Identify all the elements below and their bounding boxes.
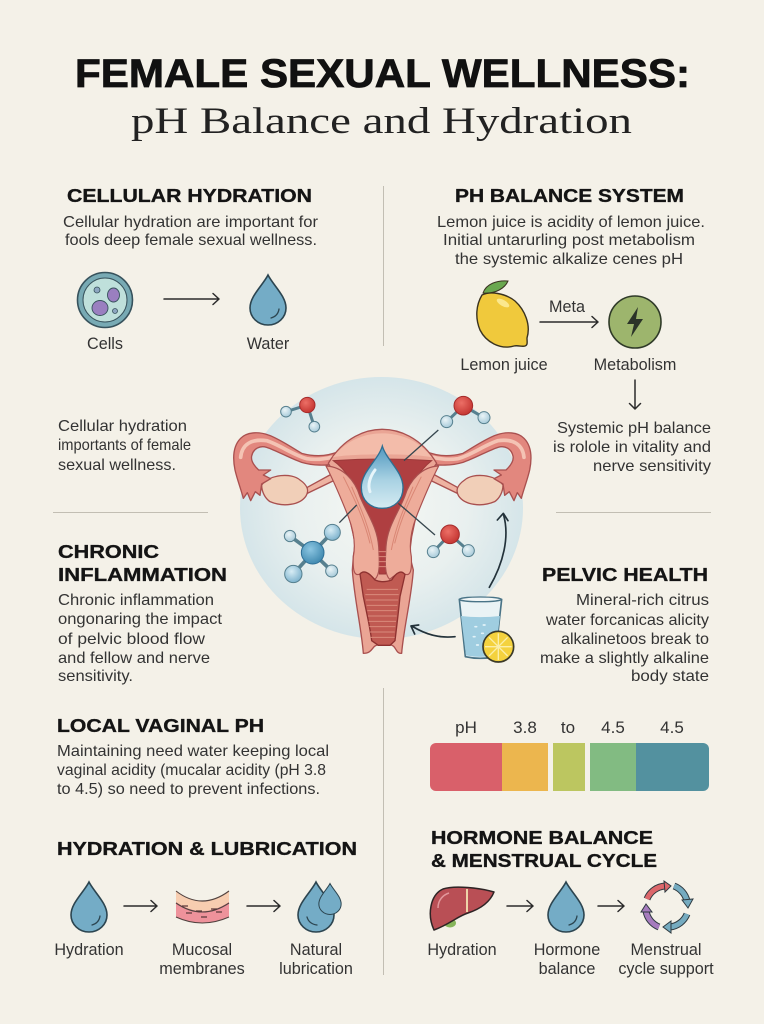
ph scale labels: 4.5 [660,718,684,737]
panel: pelvic health [540,564,709,685]
label: mucosal membranes [159,941,245,978]
arrow: glass to ovary [489,513,508,587]
arrow: glass to vagina [411,625,455,637]
text: chronic inflammation description: and fellow and nerve [58,650,210,667]
text: ph balance description: Lemon juice is acidity of lemon juice. [437,214,705,231]
text: cellular hydration description [63,214,318,249]
heading: ph balance system: PH BALANCE SYSTEM [455,185,684,206]
panel: hydration and lubrication [54,838,357,978]
label: water: Water [247,335,290,353]
background circle [240,377,523,639]
text: ph balance description: the systemic alkalize cenes pH [455,251,683,268]
arrow: membranes to lubrication [247,900,280,912]
label: meta: Meta [549,298,585,316]
icon: hydration drop [71,882,107,932]
label: natural lubrication [279,941,353,978]
icon: water drop [250,275,286,325]
heading: hormone balance and menstrual cycle: & MENSTRUAL CYCLE [431,850,657,871]
text: ph balance description: Initial untarurling post metabolism [443,232,695,249]
label: menstrual cycle support: cycle support [618,960,714,978]
label: hormone balance: balance [539,960,595,978]
central illustration: reproductive anatomy [234,377,531,662]
text: pelvic health description: alkalinetoos break to [561,631,709,648]
text: pelvic health description: Mineral-rich citrus [576,592,709,609]
text: local vaginal ph description [57,743,329,798]
label: hydration: Hydration [427,941,497,959]
label: menstrual cycle support: Menstrual [630,941,702,959]
heading: hormone balance and menstrual cycle [431,827,657,871]
anatomy [234,396,531,662]
ph scale bar [430,743,709,791]
text: chronic inflammation description: Chronic inflammation [58,592,214,609]
label: hydration: Hydration [54,941,124,959]
text: cellular hydration description: Cellular hydration are important for [63,214,318,231]
heading: pelvic health: PELVIC HEALTH [542,564,708,585]
text: local vaginal ph description: Maintaining need water keeping local [57,743,329,760]
text: local vaginal ph description: vaginal acidity (mucalar acidity (pH 3.8 [57,762,326,779]
text: cellular hydration note: sexual wellness. [58,457,176,474]
arrow: metabolism down [630,380,640,409]
icon: metabolism bolt [609,296,661,348]
arrow: liver to hormone balance [507,900,533,912]
molecule: lower right water [427,525,474,558]
ph scale labels: 4.5 [601,718,625,737]
title: FEMALE SEXUAL WELLNESS: [75,52,690,96]
ph scale labels: pH [455,718,477,737]
label: mucosal membranes: Mucosal [172,941,232,959]
panel: ph scale [430,718,709,791]
arrow: cells to water [164,294,219,304]
heading: cellular hydration: CELLULAR HYDRATION [67,185,312,206]
label: metabolism: Metabolism [594,356,676,374]
arrow: hydration to membranes [124,900,157,912]
text: local vaginal ph description: to 4.5) so need to prevent infections. [57,781,320,798]
text: chronic inflammation description [58,592,223,685]
text: systemic ph balance: Systemic pH balance [557,420,711,437]
text: chronic inflammation description: ongonaring the impact [58,611,223,628]
label: natural lubrication: lubrication [279,960,353,978]
text: systemic ph balance: nerve sensitivity [593,458,711,475]
icon: mucosal membranes [176,891,229,923]
text: cellular hydration note: importants of female [58,437,191,454]
heading: hormone balance and menstrual cycle: HORMONE BALANCE [431,827,653,848]
arrow: hormone balance to cycle [598,900,624,912]
panel: hormone balance and menstrual cycle [427,827,714,978]
panel: cellular hydration [63,185,318,353]
text: systemic ph balance: is rolole in vitality and [553,439,711,456]
panel: chronic inflammation [58,541,227,685]
icon: menstrual cycle arrows [641,881,693,933]
droplet [361,446,403,508]
title: pH Balance and Hydration [131,101,632,142]
icon: cells [78,272,132,328]
icon: lemon [477,281,528,347]
panel: local vaginal ph [57,715,329,798]
icon: hormone balance drop [548,882,584,932]
title [75,52,690,142]
molecule: top left water [281,397,320,432]
text: ph balance description [437,214,705,268]
label: menstrual cycle support [618,941,714,978]
text: systemic ph balance [553,420,711,475]
heading: local vaginal ph: LOCAL VAGINAL PH [57,715,264,736]
text: pelvic health description [540,592,709,685]
label: cells: Cells [87,335,123,353]
molecule: lower left cluster [284,524,340,583]
heading: hydration and lubrication: HYDRATION & LUBRICATION [57,838,357,859]
icon: liver [430,887,494,930]
text: cellular hydration note: Cellular hydration [58,418,187,435]
label: lemon juice: Lemon juice [460,356,548,374]
molecule: top right water [441,396,490,428]
arrow: lemon to metabolism [540,316,598,328]
panel: ph balance system [437,185,711,475]
icon: natural lubrication drops [298,882,341,932]
label: natural lubrication: Natural [290,941,342,959]
text: pelvic health description: body state [631,668,709,685]
ph scale labels [455,718,684,737]
heading: chronic inflammation: INFLAMMATION [58,564,227,585]
text: cellular hydration note [58,418,191,474]
text: chronic inflammation description: of pelvic blood flow [58,631,206,648]
ph scale labels: 3.8 [513,718,537,737]
text: cellular hydration description: fools deep female sexual wellness. [65,232,317,249]
pointer lines [339,430,438,535]
label: hormone balance [534,941,600,978]
text: pelvic health description: water forcanicas alicity [545,612,709,629]
label: hormone balance: Hormone [534,941,600,959]
ph scale labels: to [561,718,575,737]
label: mucosal membranes: membranes [159,960,245,978]
heading: chronic inflammation [58,541,227,585]
text: pelvic health description: make a slightly alkaline [540,650,709,667]
icon: water glass with lemon [459,597,514,662]
text: chronic inflammation description: sensitivity. [58,668,133,685]
heading: chronic inflammation: CHRONIC [58,541,159,562]
